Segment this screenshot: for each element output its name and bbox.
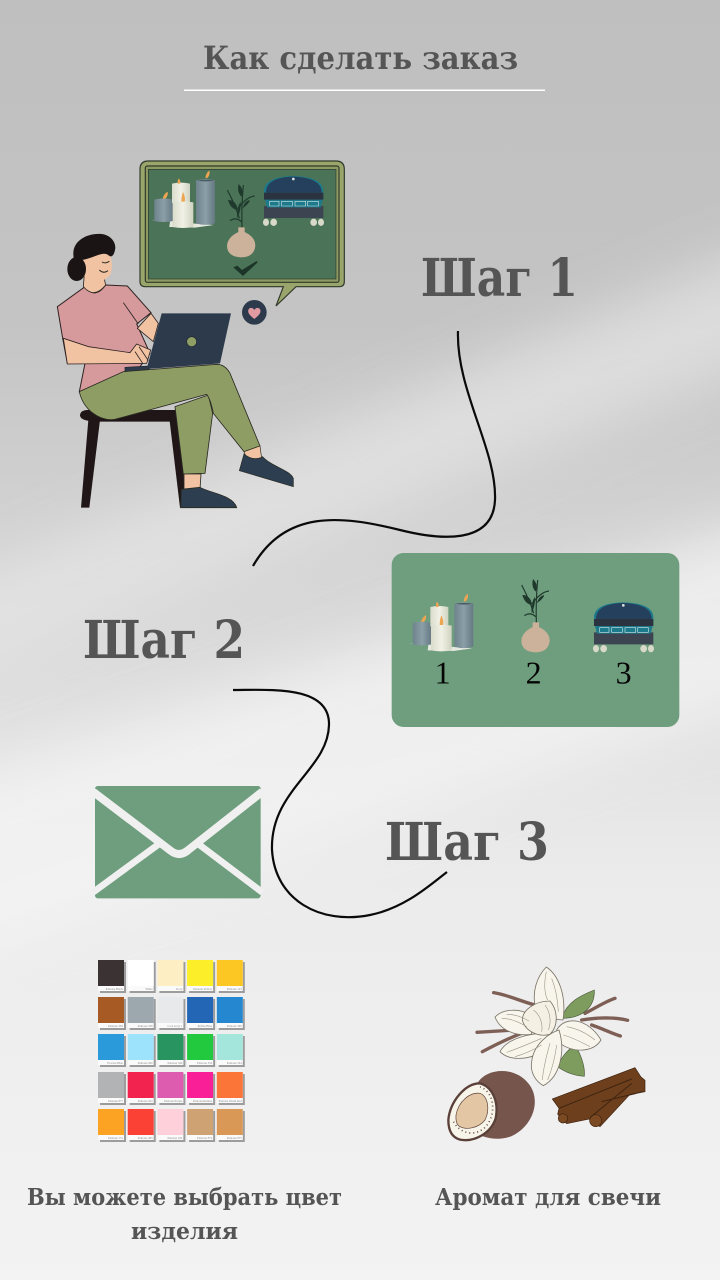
palette: colour swatches: Pantone 875	[227, 1136, 242, 1140]
shirt	[57, 285, 151, 392]
palette: colour swatches: Cool Gray 1	[168, 1024, 183, 1028]
palette: colour swatches: Process Blue	[107, 1061, 124, 1065]
palette: colour swatches: White	[145, 987, 153, 991]
icon: heart badge	[242, 300, 267, 325]
leaves	[558, 990, 594, 1076]
icon: vase	[521, 579, 550, 652]
caption: colour choice: изделия	[131, 1218, 238, 1245]
number labels: 2	[526, 654, 542, 690]
panel: numbered products	[392, 553, 679, 727]
heading: step 2: Шаг 2	[83, 610, 245, 671]
palette: colour swatches: Pantone 182	[167, 1136, 183, 1140]
icon: jewellery box	[263, 176, 324, 226]
palette: colour swatches: Reflex Blue	[198, 1024, 213, 1028]
palette: colour swatches: Pantone 324	[227, 1061, 242, 1065]
palette: colour swatches: Pantone 340	[167, 1061, 183, 1065]
vanilla pods	[477, 993, 628, 1052]
caption: candle scent: Аромат для свечи	[435, 1184, 661, 1211]
caption: colour choice: Вы можете выбрать цвет	[27, 1184, 342, 1211]
palette: colour swatches: Pantone 151	[108, 1136, 123, 1140]
arm	[63, 313, 158, 364]
palette: colour swatches: Pantone Purple	[164, 1099, 183, 1103]
chair	[80, 410, 187, 508]
palette: colour swatches: Pantone 290	[138, 1061, 153, 1065]
number labels: 1	[435, 654, 451, 690]
coconut	[448, 1071, 535, 1140]
heading: step 1: Шаг 1	[421, 248, 578, 309]
petal veins	[502, 972, 595, 1080]
title: Как сделать заказ	[203, 39, 518, 77]
icon: envelope	[93, 786, 262, 898]
caption: colour choice	[27, 1184, 342, 1245]
palette: colour swatches: Pantone Black	[106, 987, 123, 991]
icon: vase	[227, 184, 255, 257]
flower petals	[495, 967, 601, 1086]
near foot	[239, 446, 293, 487]
number labels: 3	[616, 654, 632, 690]
palette: colour swatches: Pantone 363	[108, 1024, 123, 1028]
icon: candles	[151, 170, 215, 228]
palette: colour swatches: Pantone 877	[108, 1099, 123, 1103]
icon: jewellery box	[593, 602, 654, 652]
arrow: connector step 2 to step 3	[233, 690, 447, 917]
palette: colour swatches: Pantone 874	[197, 1136, 213, 1140]
palette: colour swatches: Ivory	[176, 987, 183, 991]
head and hair	[67, 234, 115, 293]
arrow: connector step 1 to step 2	[253, 331, 495, 566]
speech bubble	[140, 161, 344, 306]
palette: colour swatches: Pantone 485	[138, 1136, 153, 1140]
illustration: woman with laptop	[57, 161, 344, 508]
far leg	[175, 395, 237, 508]
cinnamon sticks	[552, 1068, 645, 1127]
palette: colour swatches: Pantone 032	[138, 1099, 153, 1103]
number labels	[435, 654, 632, 690]
sleeve seam	[123, 303, 138, 324]
laptop	[125, 313, 231, 372]
icon: candles	[409, 594, 473, 651]
icon: check mark	[233, 261, 258, 276]
illustration: vanilla, coconut, cinnamon	[448, 967, 645, 1140]
palette: colour swatches	[98, 960, 245, 1142]
palette: colour swatches: Pantone Yellow	[193, 987, 213, 991]
palette: colour swatches: Pantone 354	[197, 1061, 213, 1065]
palette: colour swatches: Pantone 536	[138, 1024, 153, 1028]
palette: colour swatches: Pantone 300	[227, 1024, 242, 1028]
palette: colour swatches: Pantone Rubine	[193, 1099, 213, 1103]
heading: step 3: Шаг 3	[385, 812, 549, 873]
near leg	[79, 364, 260, 452]
palette: colour swatches: Pantone 123	[227, 987, 242, 991]
palette: colour swatches: Pantone Warm Red	[219, 1099, 242, 1103]
